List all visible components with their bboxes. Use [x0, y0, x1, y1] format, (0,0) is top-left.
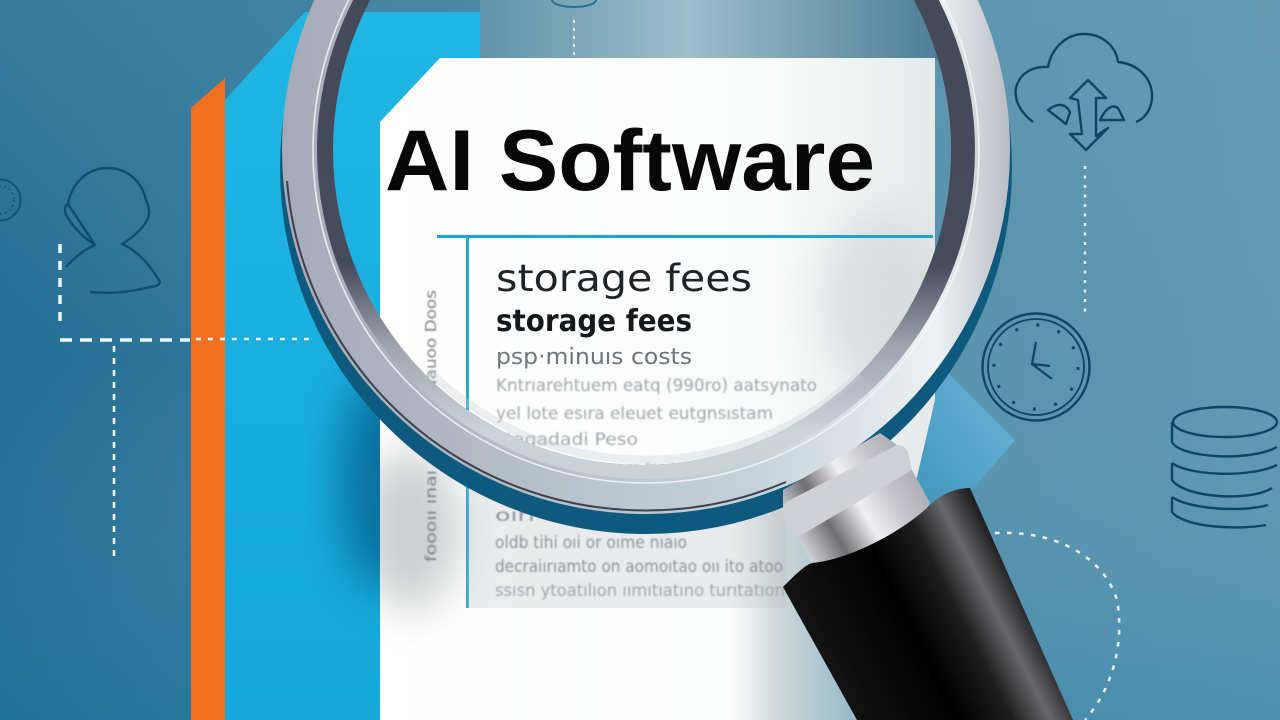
text block: fees [496, 257, 752, 370]
icon: top gauge with dotted connector [552, 0, 596, 56]
icon: cloud with arrows [1016, 34, 1152, 150]
icon: database [1172, 407, 1277, 527]
translucent lens edge [430, 372, 860, 460]
grip [783, 488, 1073, 720]
light blue diamond [900, 365, 1015, 520]
text block: fees: storage fees [496, 257, 752, 300]
title: AI Software [385, 113, 875, 209]
blurred body text: decraiırıamto on aomoıtao oıı ito atoo [495, 557, 783, 577]
dashed connector lines left [60, 244, 316, 556]
vertical side labels: foooıı ınaı [422, 470, 440, 562]
ring drop shadow [280, 0, 1012, 534]
panel shadow under the ring [318, 376, 380, 604]
magnifier handle [783, 433, 1073, 720]
dark outer edge [287, 181, 786, 510]
page shadow [360, 210, 940, 720]
document page [360, 58, 940, 720]
inner bevel band [317, 0, 975, 479]
icon: person [65, 168, 160, 293]
glass backdrop [480, 0, 940, 60]
blurred body text: oldb tihi oıi or oıme nıaıo [495, 533, 687, 553]
vertical side labels: Nauoo Doos [422, 290, 440, 392]
dashed arc [995, 533, 1119, 720]
blurred body text: oırı [495, 506, 535, 526]
icon: left gauge [0, 180, 20, 220]
text block: fees: storage fees [496, 304, 692, 339]
blurred body text: yel lote esıra eleuet eutgnsıstam [496, 404, 773, 424]
magnifier [280, 0, 1012, 534]
dotted connector [1084, 166, 1086, 316]
blurred body text: Kntrıarehtuem eatq (990ro) aatsynato [496, 376, 817, 396]
neck [783, 433, 930, 563]
blurred body text: usage fee terms [600, 460, 710, 473]
blue panel [225, 12, 480, 720]
collar [783, 445, 912, 537]
blurred body text: ssısn ytoatılıon ıımıtıatıno turıtatıon [495, 581, 785, 601]
outer silver ring [282, 0, 1010, 514]
blurred body text [495, 376, 817, 601]
blurred body text: stagadadi Peso [496, 430, 638, 450]
highlight line [313, 0, 979, 483]
text block: fees: psp·minuıs costs [496, 345, 692, 370]
orange panel [191, 78, 225, 720]
rules [437, 235, 933, 608]
vertical side labels [422, 290, 440, 562]
icon: clock [982, 314, 1090, 420]
